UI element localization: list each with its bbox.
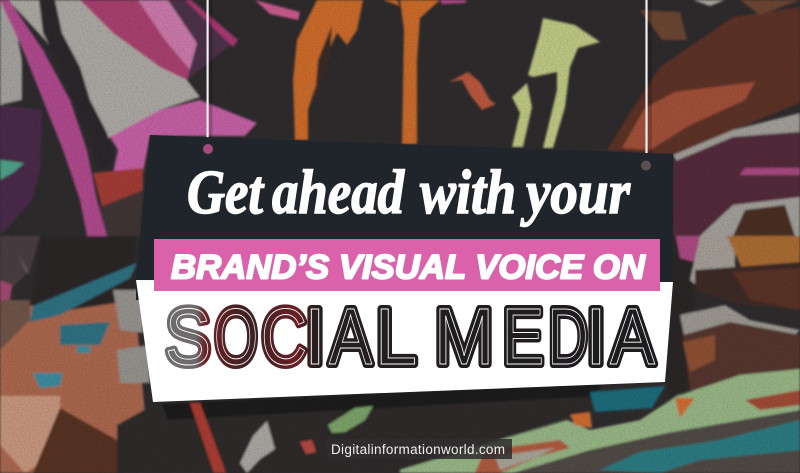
heading script: Get ahead with your: Get bbox=[187, 159, 264, 227]
heading: SOCIAL MEDIA: O bbox=[214, 292, 258, 381]
subheading text: BRAND’S VISUAL VOICE ON bbox=[171, 248, 646, 286]
orange drips bbox=[293, 0, 363, 140]
heading: SOCIAL MEDIA: I bbox=[585, 292, 607, 381]
heading script: Get ahead with your: with bbox=[420, 159, 516, 227]
sign: white lower panel bbox=[136, 280, 673, 402]
pink subheading banner bbox=[154, 239, 660, 291]
yellow-green drip bbox=[528, 18, 600, 148]
heading script: Get ahead with your: your bbox=[520, 159, 631, 227]
sign: dark upper panel bbox=[136, 135, 673, 300]
heading: SOCIAL MEDIA: L bbox=[375, 292, 417, 381]
icon: right grommet bbox=[641, 160, 651, 170]
heading: SOCIAL MEDIA: I bbox=[304, 292, 326, 381]
upper left paint bbox=[0, 0, 22, 105]
heading: SOCIAL MEDIA: I bbox=[585, 292, 607, 381]
heading: SOCIAL MEDIA: M bbox=[434, 292, 494, 381]
heading: SOCIAL MEDIA: I bbox=[304, 292, 326, 381]
lower center dark paint bbox=[117, 386, 600, 473]
heading: SOCIAL MEDIA: L bbox=[375, 292, 417, 381]
heading script: Get ahead with your: ahead bbox=[272, 159, 405, 227]
heading: SOCIAL MEDIA: S bbox=[165, 292, 211, 381]
heading: SOCIAL MEDIA: A bbox=[610, 292, 656, 381]
lower right paint bbox=[400, 369, 800, 473]
heading: SOCIAL MEDIA: A bbox=[329, 292, 373, 381]
lower left paint bbox=[30, 236, 135, 310]
watermark: Digitalinformationworld.com bbox=[331, 442, 505, 457]
heading: SOCIAL MEDIA bbox=[165, 292, 656, 381]
heading: SOCIAL MEDIA: E bbox=[502, 292, 544, 381]
icon: left grommet bbox=[203, 144, 213, 154]
heading script: Get ahead with your bbox=[187, 159, 631, 227]
upper right paint bbox=[640, 10, 687, 40]
heading: SOCIAL MEDIA: C bbox=[261, 292, 307, 381]
heading: SOCIAL MEDIA: A bbox=[610, 292, 656, 381]
heading: SOCIAL MEDIA: C bbox=[261, 292, 307, 381]
heading: SOCIAL MEDIA: A bbox=[329, 292, 373, 381]
heading: SOCIAL MEDIA: S bbox=[165, 292, 211, 381]
heading: SOCIAL MEDIA: E bbox=[502, 292, 544, 381]
heading: SOCIAL MEDIA: O bbox=[214, 292, 258, 381]
heading: SOCIAL MEDIA: M bbox=[434, 292, 494, 381]
heading: SOCIAL MEDIA: D bbox=[548, 292, 588, 381]
hanging strings bbox=[206, 0, 652, 163]
heading: SOCIAL MEDIA: D bbox=[548, 292, 588, 381]
right column paint bbox=[665, 236, 695, 400]
